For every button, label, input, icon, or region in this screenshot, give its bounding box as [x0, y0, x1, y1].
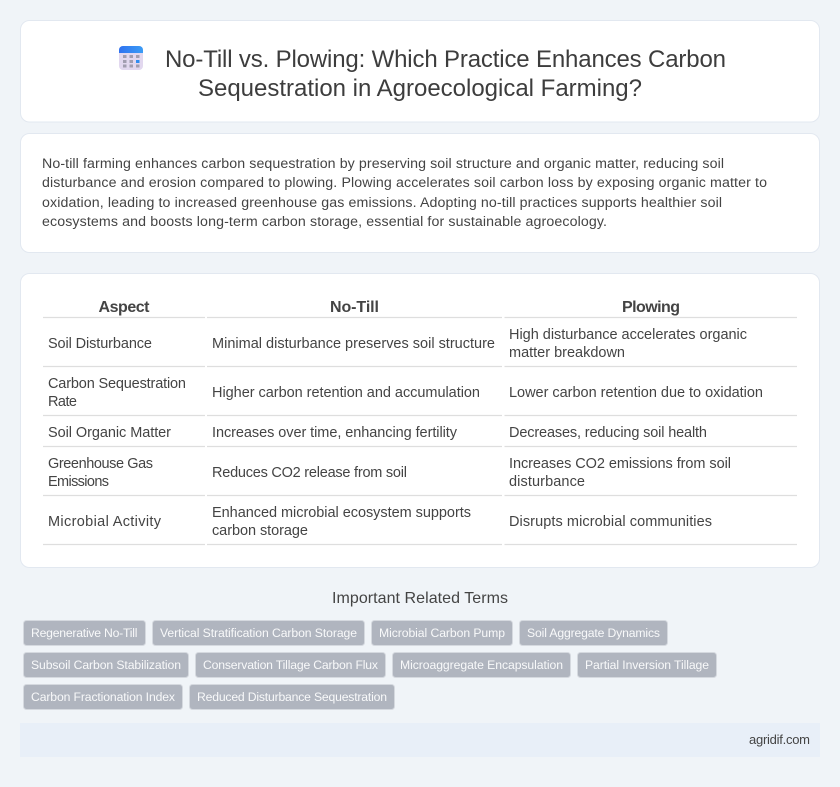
text block: summary paragraph: disturbance and erosion compared to plowing. Plowing accelerates soil carbon loss by exposing organic matter to: [42, 175, 767, 191]
panel: comparison table: [20, 274, 820, 568]
row: greenhouse gas emissions: disturbance: [509, 474, 585, 490]
chip: [392, 652, 570, 678]
chip: Partial Inversion Tillage: [585, 658, 709, 672]
row: carbon sequestration rate: Higher carbon retention and accumulation: [212, 385, 480, 401]
chip: Regenerative No-Till: [31, 626, 138, 640]
table header: [98, 299, 680, 316]
row: microbial activity: Disrupts microbial communities: [509, 514, 712, 530]
icon: calendar: [119, 46, 143, 70]
row: soil disturbance: matter breakdown: [509, 345, 625, 361]
chip: Microaggregate Encapsulation: [400, 658, 563, 672]
row: greenhouse gas emissions: Increases CO2 emissions from soil: [509, 456, 731, 472]
row: microbial activity: [48, 505, 712, 539]
chip: [190, 684, 394, 710]
table header: Aspect: [98, 299, 150, 316]
row: microbial activity: Enhanced microbial ecosystem supports: [212, 505, 471, 521]
table header: No-Till: [330, 299, 379, 316]
heading: important related terms: Important Related Terms: [332, 590, 508, 607]
footer: agridif.com: [749, 732, 810, 747]
row: greenhouse gas emissions: Emissions: [48, 474, 109, 490]
row: soil disturbance: Minimal disturbance preserves soil structure: [212, 336, 495, 352]
footer: [20, 723, 820, 757]
text block: summary paragraph: [42, 156, 767, 230]
chip: Conservation Tillage Carbon Flux: [203, 658, 378, 672]
row: carbon sequestration rate: [48, 376, 763, 410]
row: soil organic matter: Increases over time, enhancing fertility: [212, 425, 458, 441]
row: soil disturbance: [48, 327, 747, 361]
row: greenhouse gas emissions: [48, 456, 731, 490]
text block: summary paragraph: oxidation, leading to increased greenhouse gas emissions. Adopting no-till practices supports healthier soil: [42, 195, 722, 211]
chip: [24, 652, 188, 678]
chip: [24, 620, 146, 646]
row: carbon sequestration rate: Rate: [48, 394, 77, 410]
chip: Subsoil Carbon Stabilization: [31, 658, 181, 672]
row: carbon sequestration rate: Carbon Sequestration: [48, 376, 186, 392]
chip: [520, 620, 668, 646]
chip: [24, 684, 182, 710]
row: soil organic matter: Soil Organic Matter: [48, 425, 171, 441]
row: carbon sequestration rate: Lower carbon retention due to oxidation: [509, 385, 763, 401]
row: microbial activity: Microbial Activity: [48, 514, 162, 530]
title: Sequestration in Agroecological Farming?: [198, 75, 642, 102]
row: soil organic matter: Decreases, reducing soil health: [509, 425, 707, 441]
related terms chips: [24, 620, 716, 710]
row: soil disturbance: High disturbance accelerates organic: [509, 327, 747, 343]
chip: Soil Aggregate Dynamics: [527, 626, 660, 640]
row: soil organic matter: [48, 425, 707, 441]
chip: Reduced Disturbance Sequestration: [197, 690, 387, 704]
chip: Vertical Stratification Carbon Storage: [160, 626, 357, 640]
text block: summary paragraph: ecosystems and boosts long-term carbon storage, essential for sustainable agroecology.: [42, 214, 607, 230]
chip: [196, 652, 386, 678]
panel: summary card: [20, 134, 820, 252]
row: microbial activity: carbon storage: [212, 523, 308, 539]
row: greenhouse gas emissions: Greenhouse Gas: [48, 456, 153, 472]
panel: title card: [20, 20, 820, 122]
title: No-Till vs. Plowing: Which Practice Enhances Carbon: [165, 46, 726, 73]
table header: Plowing: [622, 299, 680, 316]
row: soil disturbance: Soil Disturbance: [48, 336, 152, 352]
text block: summary paragraph: No-till farming enhances carbon sequestration by preserving soil structure and organic matter, reducing soil: [42, 156, 724, 172]
chip: [372, 620, 512, 646]
chip: Carbon Fractionation Index: [31, 690, 175, 704]
chip: [152, 620, 364, 646]
row: greenhouse gas emissions: Reduces CO2 release from soil: [212, 465, 407, 481]
title: [165, 46, 726, 102]
chip: Microbial Carbon Pump: [379, 626, 505, 640]
chip: [578, 652, 716, 678]
